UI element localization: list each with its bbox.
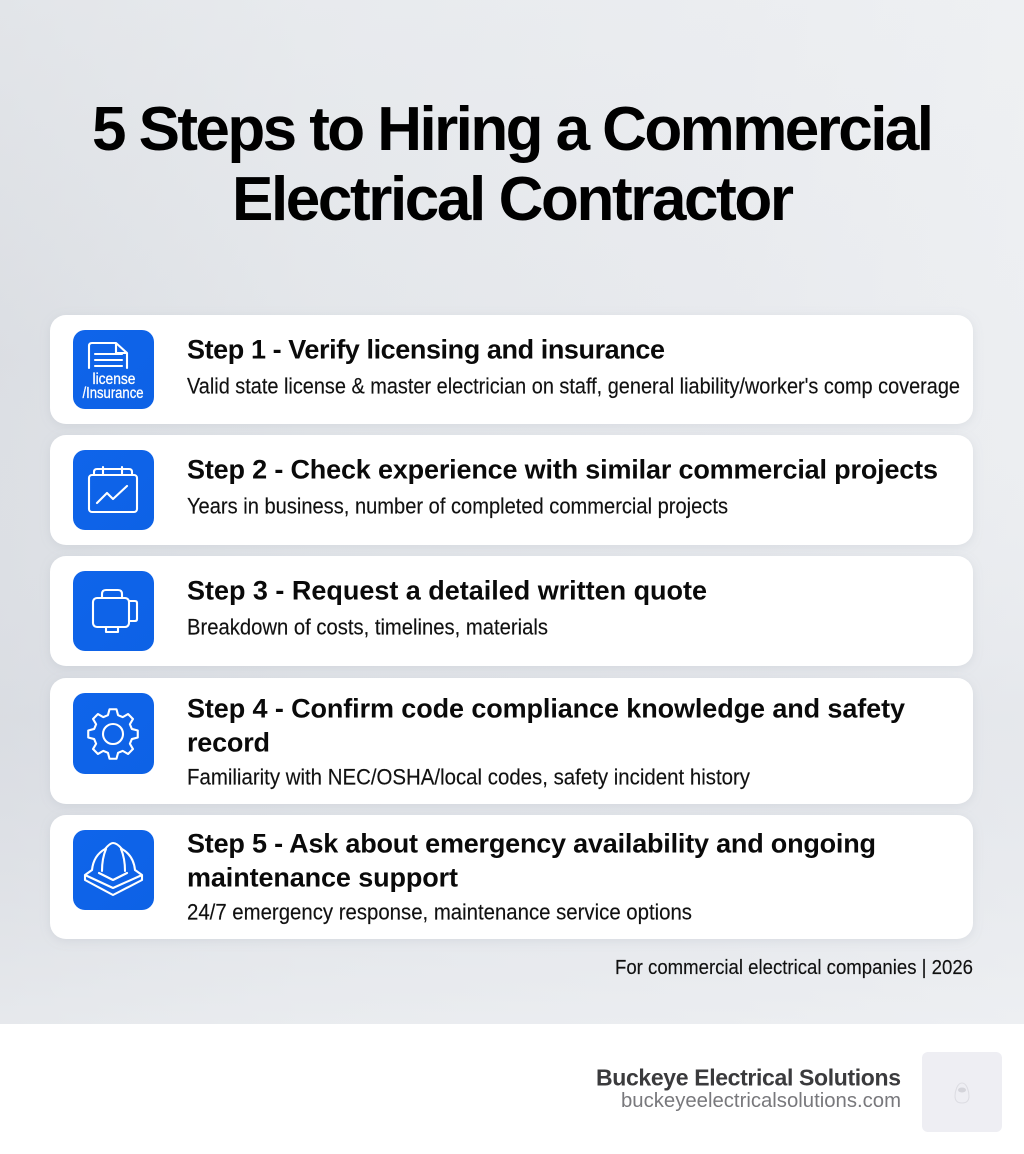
icon: hard hat	[73, 830, 154, 910]
panel: step 2	[50, 435, 973, 545]
step 5 description: 24/7 emergency response, maintenance service options	[187, 900, 692, 924]
title	[92, 95, 934, 234]
step 5 heading	[187, 828, 876, 892]
step 2 heading: Step 2 - Check experience with similar commercial projects	[187, 454, 938, 484]
panel: step 1	[50, 315, 973, 424]
title: 5 Steps to Hiring a Commercial	[92, 95, 934, 164]
step 4 heading	[187, 694, 905, 758]
company name: Buckeye Electrical Solutions	[596, 1064, 901, 1090]
step 5 heading: maintenance support	[187, 862, 458, 892]
step 4 description: Familiarity with NEC/OSHA/local codes, safety incident history	[187, 764, 750, 790]
icon: license document: /Insurance	[82, 385, 144, 402]
step 1 heading: Step 1 - Verify licensing and insurance	[187, 334, 665, 364]
step 2 description: Years in business, number of completed commercial projects	[187, 494, 728, 518]
step 3 description: Breakdown of costs, timelines, materials	[187, 614, 548, 640]
panel: step 5	[50, 815, 973, 939]
icon: license document	[73, 330, 154, 409]
logo placeholder	[922, 1052, 1002, 1132]
icon: gear	[73, 693, 154, 774]
step 3 heading: Step 3 - Request a detailed written quote	[187, 576, 707, 606]
step 4 heading: Step 4 - Confirm code compliance knowledge and safety	[187, 694, 905, 724]
footnote: For commercial electrical companies | 2026	[615, 957, 973, 979]
panel: step 3	[50, 556, 973, 666]
icon: calendar with trend line	[73, 450, 154, 530]
title: Electrical Contractor	[232, 165, 794, 234]
step 4 heading: record	[187, 728, 270, 758]
step 5 heading: Step 5 - Ask about emergency availability and ongoing	[187, 828, 876, 858]
company website: buckeyeelectricalsolutions.com	[621, 1090, 901, 1112]
step 1 description: Valid state license & master electrician on staff, general liability/worker's comp coverage	[187, 374, 960, 398]
icon: quote device	[73, 571, 154, 651]
icon: license document: license	[92, 371, 136, 388]
footer bar	[0, 1024, 1024, 1154]
panel: step 4	[50, 678, 973, 804]
